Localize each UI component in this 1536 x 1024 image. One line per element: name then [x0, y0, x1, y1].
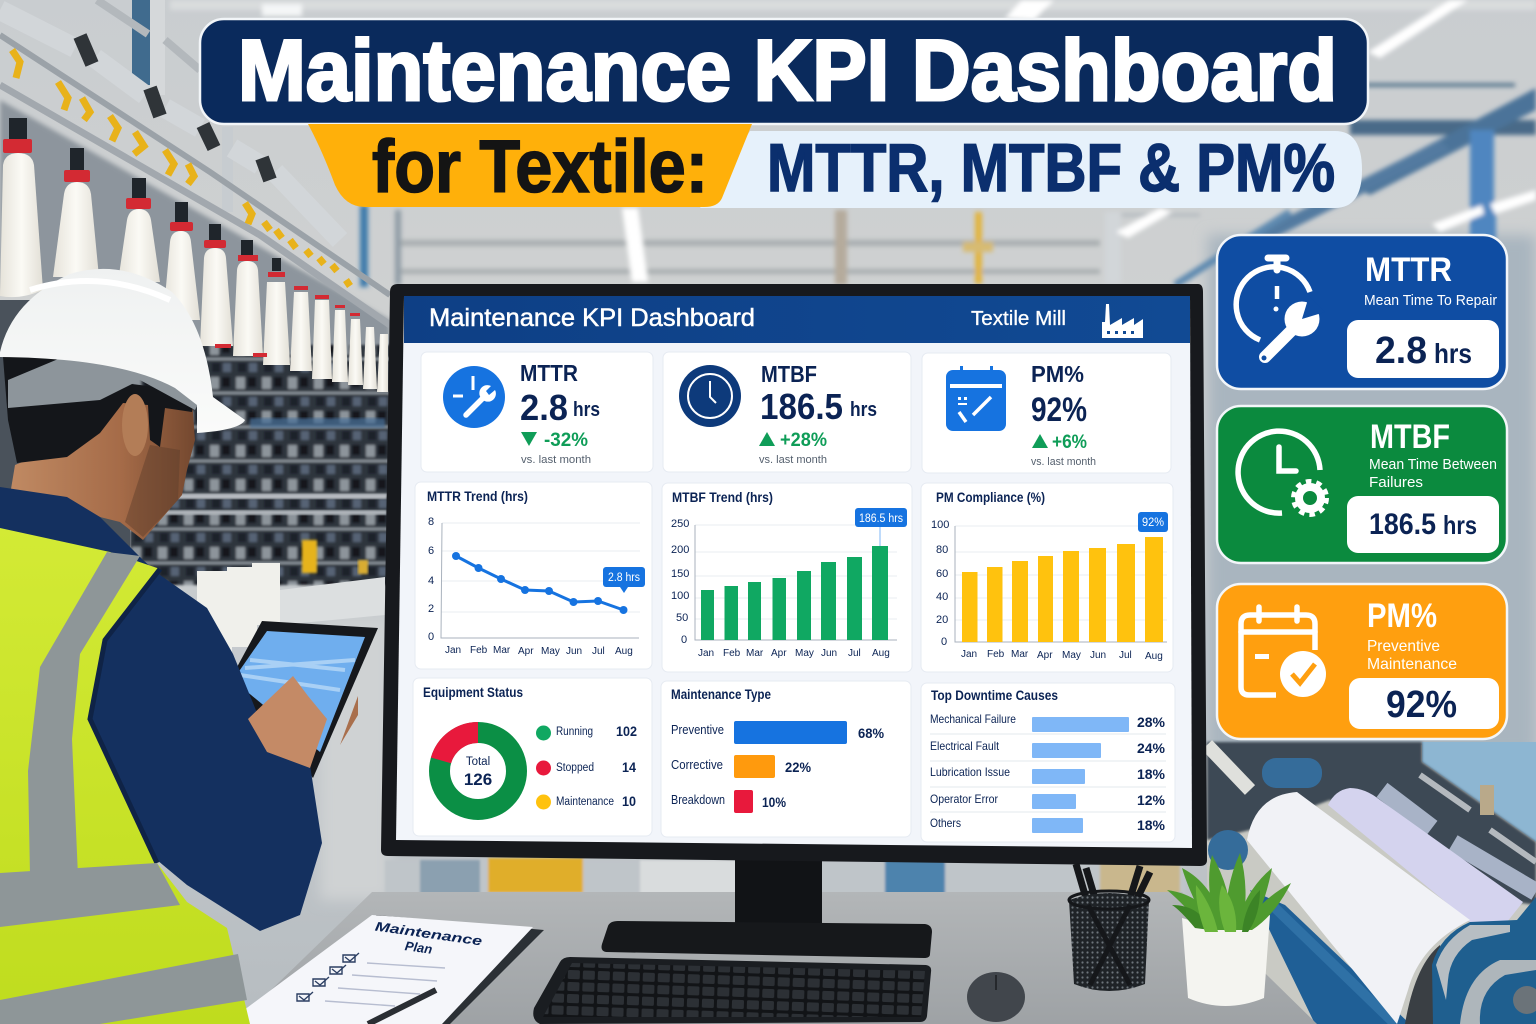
panel: top downtime causes: Others: [930, 816, 961, 830]
bar chart: PM compliance: PM Compliance (%): [936, 490, 1045, 505]
line chart: MTTR trend: Jan: [445, 645, 461, 656]
icon: factory: [1102, 304, 1143, 338]
line chart: MTTR trend: Apr: [518, 646, 534, 657]
callout: 2.8 hrs: [603, 567, 645, 593]
panel: top downtime causes: Operator Error: [930, 792, 998, 806]
bar chart: PM compliance: Jan: [961, 649, 977, 660]
bar chart: MTBF trend: [662, 483, 912, 672]
monitor: [381, 284, 1207, 958]
icon: blue calendar: [946, 366, 1006, 431]
bar chart: MTBF trend: Jun: [821, 648, 837, 659]
panel: maintenance type: 22%: [785, 759, 812, 775]
panel: maintenance type: Preventive: [671, 723, 724, 737]
KPI card: MTBF: 186.5: [760, 386, 843, 427]
legend: 10: [622, 793, 636, 809]
keyboard: [533, 957, 931, 1024]
bar chart: PM compliance: Jun: [1090, 650, 1106, 661]
callout: 186.5 hrs: 186.5 hrs: [859, 513, 903, 525]
icon: clock in navy circle: [679, 365, 741, 427]
panel: maintenance type: Corrective: [671, 758, 723, 772]
background: textile machine with fabric rollers: [1207, 742, 1536, 1024]
subtitle: for Textile: for Textile:: [372, 125, 708, 208]
panel: equipment status: [413, 678, 652, 836]
callout: 2.8 hrs: 2.8 hrs: [608, 572, 640, 584]
side panel: PM%: PM%: [1367, 597, 1437, 635]
bar chart: PM compliance: Jul: [1119, 650, 1132, 661]
panel: top downtime causes: 12%: [1137, 792, 1166, 808]
donut chart: Total: [466, 756, 490, 768]
panel: maintenance type: 10%: [762, 794, 786, 810]
bar chart: MTBF trend: 50: [676, 612, 688, 624]
bar chart: MTBF trend: MTBF Trend (hrs): [672, 490, 773, 505]
panel: top downtime causes: 24%: [1137, 740, 1166, 756]
clipboard with maintenance plan: Plan: [404, 938, 433, 957]
panel: maintenance type: Breakdown: [671, 793, 725, 807]
safety vest: [0, 528, 250, 1024]
line chart: MTTR trend: MTTR Trend (hrs): [427, 489, 528, 504]
hair: [3, 357, 195, 463]
jacket: [0, 487, 322, 931]
side panel: MTTR: Mean Time To Repair: [1364, 292, 1497, 309]
side panel: MTTR: [1217, 235, 1507, 389]
bar chart: MTBF trend: 200: [671, 544, 689, 556]
legend: Running: [556, 726, 593, 738]
KPI card: MTBF: +28%: [780, 430, 827, 451]
neck and face: [10, 400, 195, 540]
bar chart: PM compliance: 60: [936, 568, 948, 580]
callout: 92%: [1138, 512, 1168, 532]
side panel: MTBF: hrs: [1443, 510, 1477, 540]
panel: equipment status: Equipment Status: [423, 685, 523, 700]
subtitle: MTTR, MTBF and PM%: MTTR, MTBF & PM%: [767, 130, 1335, 206]
stubble on jaw: [125, 445, 180, 537]
line chart: MTTR trend: Feb: [470, 645, 488, 656]
KPI card: PM%: 92%: [1031, 391, 1087, 429]
ceiling lights: [1368, 0, 1468, 58]
white hard hat: [0, 269, 245, 433]
panel: top downtime causes: Top Downtime Causes: [931, 688, 1058, 703]
panel: maintenance type: 68%: [858, 725, 885, 741]
bar chart: PM compliance: [921, 483, 1173, 672]
KPI card: PM%: [922, 353, 1171, 473]
line chart: MTTR trend: Mar: [493, 645, 511, 656]
KPI card: PM%: PM%: [1031, 361, 1084, 387]
hand: [248, 676, 327, 768]
panel: maintenance type: Maintenance Type: [671, 687, 771, 702]
ceiling bands above monitor: [400, 240, 1100, 246]
bar chart: PM compliance: 0: [941, 636, 947, 648]
bar chart: PM compliance: Feb: [987, 649, 1005, 660]
KPI card: MTTR: [421, 352, 653, 472]
bar chart: MTBF trend: 250: [671, 518, 689, 530]
line chart: MTTR trend: Aug: [615, 646, 633, 657]
bar chart: MTBF trend: Jan: [698, 648, 714, 659]
KPI card: MTTR: -32%: [544, 430, 588, 451]
worker: [0, 269, 378, 1024]
bar chart: PM compliance: Apr: [1037, 650, 1053, 661]
KPI card: MTTR: vs. last month: [521, 454, 591, 466]
side panel: PM%: 92%: [1386, 684, 1457, 726]
panel: top downtime causes: Mechanical Failure: [930, 712, 1016, 726]
line chart: MTTR trend: 0: [428, 631, 434, 643]
donut chart: [440, 732, 516, 810]
bar chart: PM compliance: Aug: [1145, 651, 1163, 662]
side panel: PM%: [1217, 584, 1507, 739]
bar chart: MTBF trend: Aug: [872, 648, 890, 659]
line chart: MTTR trend: Jul: [592, 646, 605, 657]
side panel: PM%: Preventive: [1367, 638, 1440, 655]
line chart: MTTR trend: 2: [428, 603, 434, 615]
KPI card: MTBF: vs. last month: [759, 454, 827, 466]
KPI card: MTBF: hrs: [850, 399, 877, 421]
helmet strap: [8, 357, 200, 410]
callout: 92%: 92%: [1142, 515, 1164, 529]
KPI card: MTTR: MTTR: [520, 360, 578, 386]
line chart: MTTR trend: Jun: [566, 646, 582, 657]
mouse: [967, 972, 1025, 1022]
icon: stopwatch and wrench: [1236, 258, 1325, 360]
bar chart: MTBF trend: 100: [671, 590, 689, 602]
line chart: MTTR trend: May: [541, 646, 560, 657]
vest reflective stripes: [0, 552, 247, 1024]
side panel: MTTR: MTTR: [1365, 251, 1452, 289]
bar chart: MTBF trend: 150: [671, 568, 689, 580]
legend: Stopped: [556, 762, 594, 774]
background: yarn spinning machine: [0, 0, 392, 656]
bar chart: MTBF trend: Apr: [771, 648, 787, 659]
panel: top downtime causes: Lubrication Issue: [930, 765, 1010, 779]
clipboard with maintenance plan: Maintenance: [374, 919, 483, 948]
bar chart: MTBF trend: Jul: [848, 648, 861, 659]
side panel: MTBF: Mean Time Between: [1369, 456, 1497, 473]
side panel: MTBF: 186.5: [1369, 508, 1436, 541]
upper ceiling structure: [170, 0, 1536, 10]
KPI card: PM%: +6%: [1052, 432, 1087, 453]
icon: calendar and check: [1241, 607, 1326, 697]
bar chart: MTBF trend: May: [795, 648, 814, 659]
bar chart: PM compliance: 100: [931, 519, 949, 531]
side panel: MTTR: 2.8: [1375, 330, 1427, 372]
bar chart: MTBF trend: Mar: [746, 648, 764, 659]
panel: top downtime causes: 28%: [1137, 714, 1166, 730]
panel: top downtime causes: 18%: [1137, 817, 1166, 833]
background: blurred objects behind desk: [385, 858, 1185, 895]
pen holder: [1069, 864, 1150, 991]
ear: [122, 394, 148, 456]
KPI card: PM%: vs. last month: [1031, 456, 1096, 468]
side panel: PM%: Maintenance: [1367, 656, 1457, 673]
callout: 186.5 hrs: [855, 508, 907, 546]
donut chart: 126: [464, 770, 492, 789]
panel: maintenance type: [661, 681, 911, 837]
dashboard header: Textile Mill: [971, 308, 1066, 330]
side panel: MTBF: [1217, 406, 1507, 563]
bar chart: MTBF trend: Feb: [723, 648, 741, 659]
legend: Maintenance: [556, 796, 614, 808]
KPI card: MTBF: [663, 352, 911, 472]
side panel: MTBF: MTBF: [1370, 418, 1450, 456]
bar chart: MTBF trend: 0: [681, 634, 687, 646]
KPI card: MTTR: 2.8: [520, 387, 568, 428]
dashboard header: [404, 296, 1190, 343]
subtitle: for Textile: [308, 124, 1362, 208]
tablet: [230, 621, 378, 778]
panel: top downtime causes: Electrical Fault: [930, 739, 1000, 753]
line chart: MTTR trend: 4: [428, 575, 434, 587]
panel: top downtime causes: 18%: [1137, 766, 1166, 782]
potted plant: [1167, 853, 1291, 1006]
line chart: MTTR trend: [415, 482, 652, 669]
panel: top downtime causes: [921, 683, 1175, 842]
legend: 102: [616, 723, 637, 739]
bar chart: PM compliance: 20: [936, 614, 948, 626]
icon: wrench in blue circle: [443, 366, 505, 428]
bar chart: PM compliance: 80: [936, 544, 948, 556]
KPI card: MTBF: MTBF: [761, 361, 817, 387]
dashboard header: Maintenance KPI Dashboard: [429, 304, 755, 332]
KPI card: MTTR: hrs: [573, 399, 600, 421]
bar chart: PM compliance: May: [1062, 650, 1081, 661]
side panel: MTTR: hrs: [1434, 338, 1472, 369]
title banner: Maintenance KPI Dashboard: [238, 23, 1337, 119]
side panel: MTBF: Failures: [1369, 474, 1423, 491]
bar chart: PM compliance: Mar: [1011, 649, 1029, 660]
clipboard with maintenance plan: [244, 915, 544, 1024]
bar chart: PM compliance: 40: [936, 591, 948, 603]
icon: clock and gear: [1238, 431, 1326, 514]
legend: [536, 723, 637, 810]
desk: [236, 892, 1317, 1024]
line chart: MTTR trend: 8: [428, 516, 434, 528]
legend: 14: [622, 759, 636, 775]
line chart: MTTR trend: 6: [428, 545, 434, 557]
